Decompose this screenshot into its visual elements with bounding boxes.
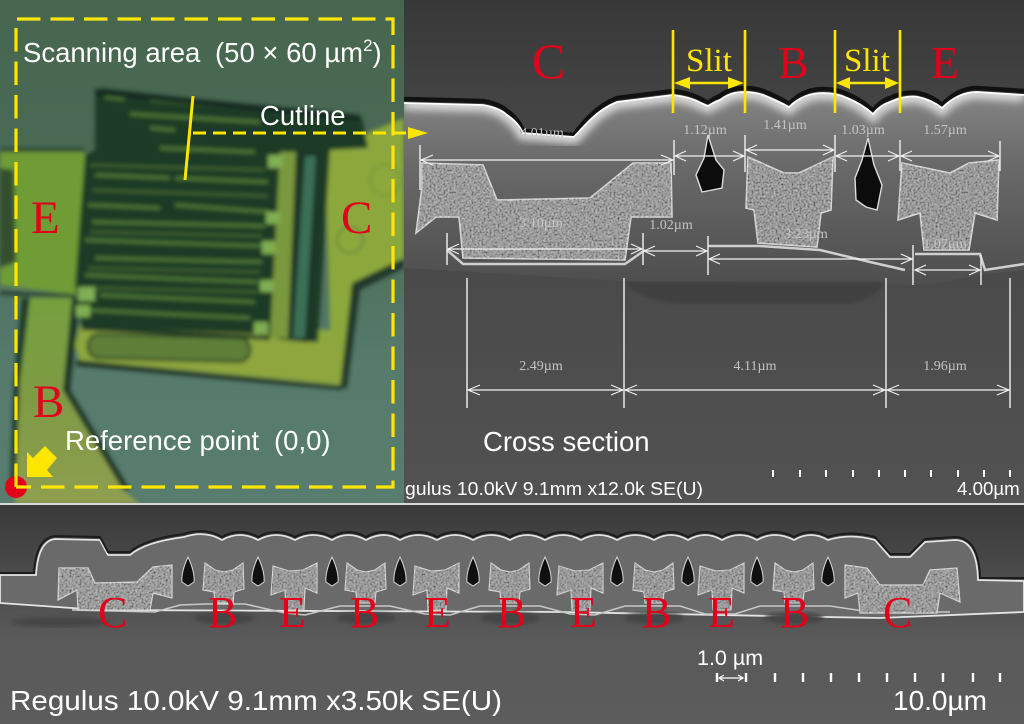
optical image of device layout — [0, 88, 404, 504]
surface dark line — [0, 531, 1024, 578]
metal pad C — [416, 163, 672, 260]
cutline label: Cutline — [260, 100, 346, 131]
reference point label: (0,0) — [274, 425, 331, 456]
slit label 2: Slit — [844, 43, 890, 79]
measurement labels: 4.01µm — [520, 126, 564, 141]
slit markers — [673, 30, 900, 113]
terminal labels row: B — [497, 588, 526, 637]
terminal label E: E — [931, 37, 959, 88]
heading: scanning area: Scanning area — [23, 37, 200, 68]
interdigitated pads — [203, 563, 814, 610]
lower metal strips — [447, 246, 1024, 270]
terminal labels row: B — [208, 588, 237, 637]
scale value: 4.00µm — [957, 478, 1020, 499]
SEM info bar text: gulus 10.0kV 9.1mm x12.0k SE(U) — [405, 479, 703, 499]
heading: scanning area: (50 × 60 µm — [215, 37, 363, 68]
metal pad C left — [58, 565, 172, 610]
reference point marker — [5, 476, 27, 498]
measurement labels: 1.41µm — [763, 118, 807, 133]
scale value: 10.0µm — [893, 685, 987, 716]
surface dark line — [404, 88, 1024, 135]
metal pad C right — [845, 565, 960, 613]
slit voids — [182, 557, 834, 586]
device dielectric — [0, 534, 1024, 618]
terminal labels row — [98, 588, 912, 637]
measurement labels: 1.02µm — [649, 218, 693, 233]
dielectric body — [404, 92, 1024, 285]
panel: cross section SEM — [404, 0, 1024, 503]
SEM background — [404, 0, 1024, 503]
terminal label B: B — [778, 37, 809, 88]
measurement labels: 1.96µm — [923, 359, 967, 374]
terminal labels row: B — [642, 588, 671, 637]
SEM info bar text: Regulus 10.0kV 9.1mm x3.50k SE(U) — [10, 685, 502, 716]
metal pad E — [898, 160, 999, 250]
pad texture — [203, 563, 814, 610]
terminal labels row: E — [424, 588, 451, 637]
surface highlight — [404, 92, 1024, 137]
measurement labels: 1.57µm — [923, 123, 967, 138]
measurement labels: 4.11µm — [734, 359, 777, 374]
wavy layer boundary — [72, 604, 950, 615]
terminal labels row: B — [350, 588, 379, 637]
terminal label B: B — [33, 376, 64, 428]
scale ruler ticks — [717, 673, 1000, 682]
scale ruler arrow — [719, 675, 743, 681]
substrate recess — [624, 282, 886, 304]
caption: cross section: Cross section — [483, 426, 650, 457]
cutline marker — [185, 96, 193, 180]
surface glow — [404, 92, 1024, 137]
measurement labels: 1.12µm — [683, 123, 727, 138]
terminal labels row: B — [780, 588, 809, 637]
heading: scanning area: 2 — [363, 36, 373, 55]
panel separator — [0, 503, 1024, 505]
terminal label E: E — [31, 192, 60, 244]
terminal labels row: E — [570, 588, 597, 637]
reference arrow — [27, 446, 57, 477]
scale ruler label: 1.0 µm — [697, 646, 763, 670]
SEM background — [0, 505, 1024, 724]
terminal labels row: E — [279, 588, 306, 637]
microscope background — [0, 0, 404, 504]
slit label 1: Slit — [686, 43, 732, 79]
dimension lines upper — [420, 135, 1000, 285]
measurement labels: 2.49µm — [519, 359, 563, 374]
slit void left — [696, 135, 724, 192]
terminal labels row: C — [883, 588, 912, 637]
reference point label: Reference point — [65, 425, 259, 456]
measurement labels — [519, 118, 967, 374]
substrate shadows — [10, 612, 824, 627]
measurement labels: 3.10µm — [519, 216, 563, 231]
arrow: cutline — [193, 127, 428, 139]
scanning area dashed frame — [16, 19, 393, 487]
panel: optical micrograph — [0, 0, 404, 504]
heading: scanning area: ) — [373, 37, 382, 68]
dimension lines lower — [467, 278, 1010, 408]
terminal label C: C — [532, 33, 565, 89]
measurement labels: 1.03µm — [841, 123, 885, 138]
scale ticks — [773, 470, 1010, 477]
terminal label C: C — [341, 192, 372, 244]
metal pad B — [746, 157, 833, 247]
measurement labels: 3.23µm — [784, 227, 828, 242]
panel: wide SEM cross section — [0, 505, 1024, 724]
terminal labels row: E — [708, 588, 735, 637]
terminal labels row: C — [98, 588, 127, 637]
measurement labels: 1.07µm — [923, 237, 967, 252]
slit void right — [855, 138, 882, 210]
